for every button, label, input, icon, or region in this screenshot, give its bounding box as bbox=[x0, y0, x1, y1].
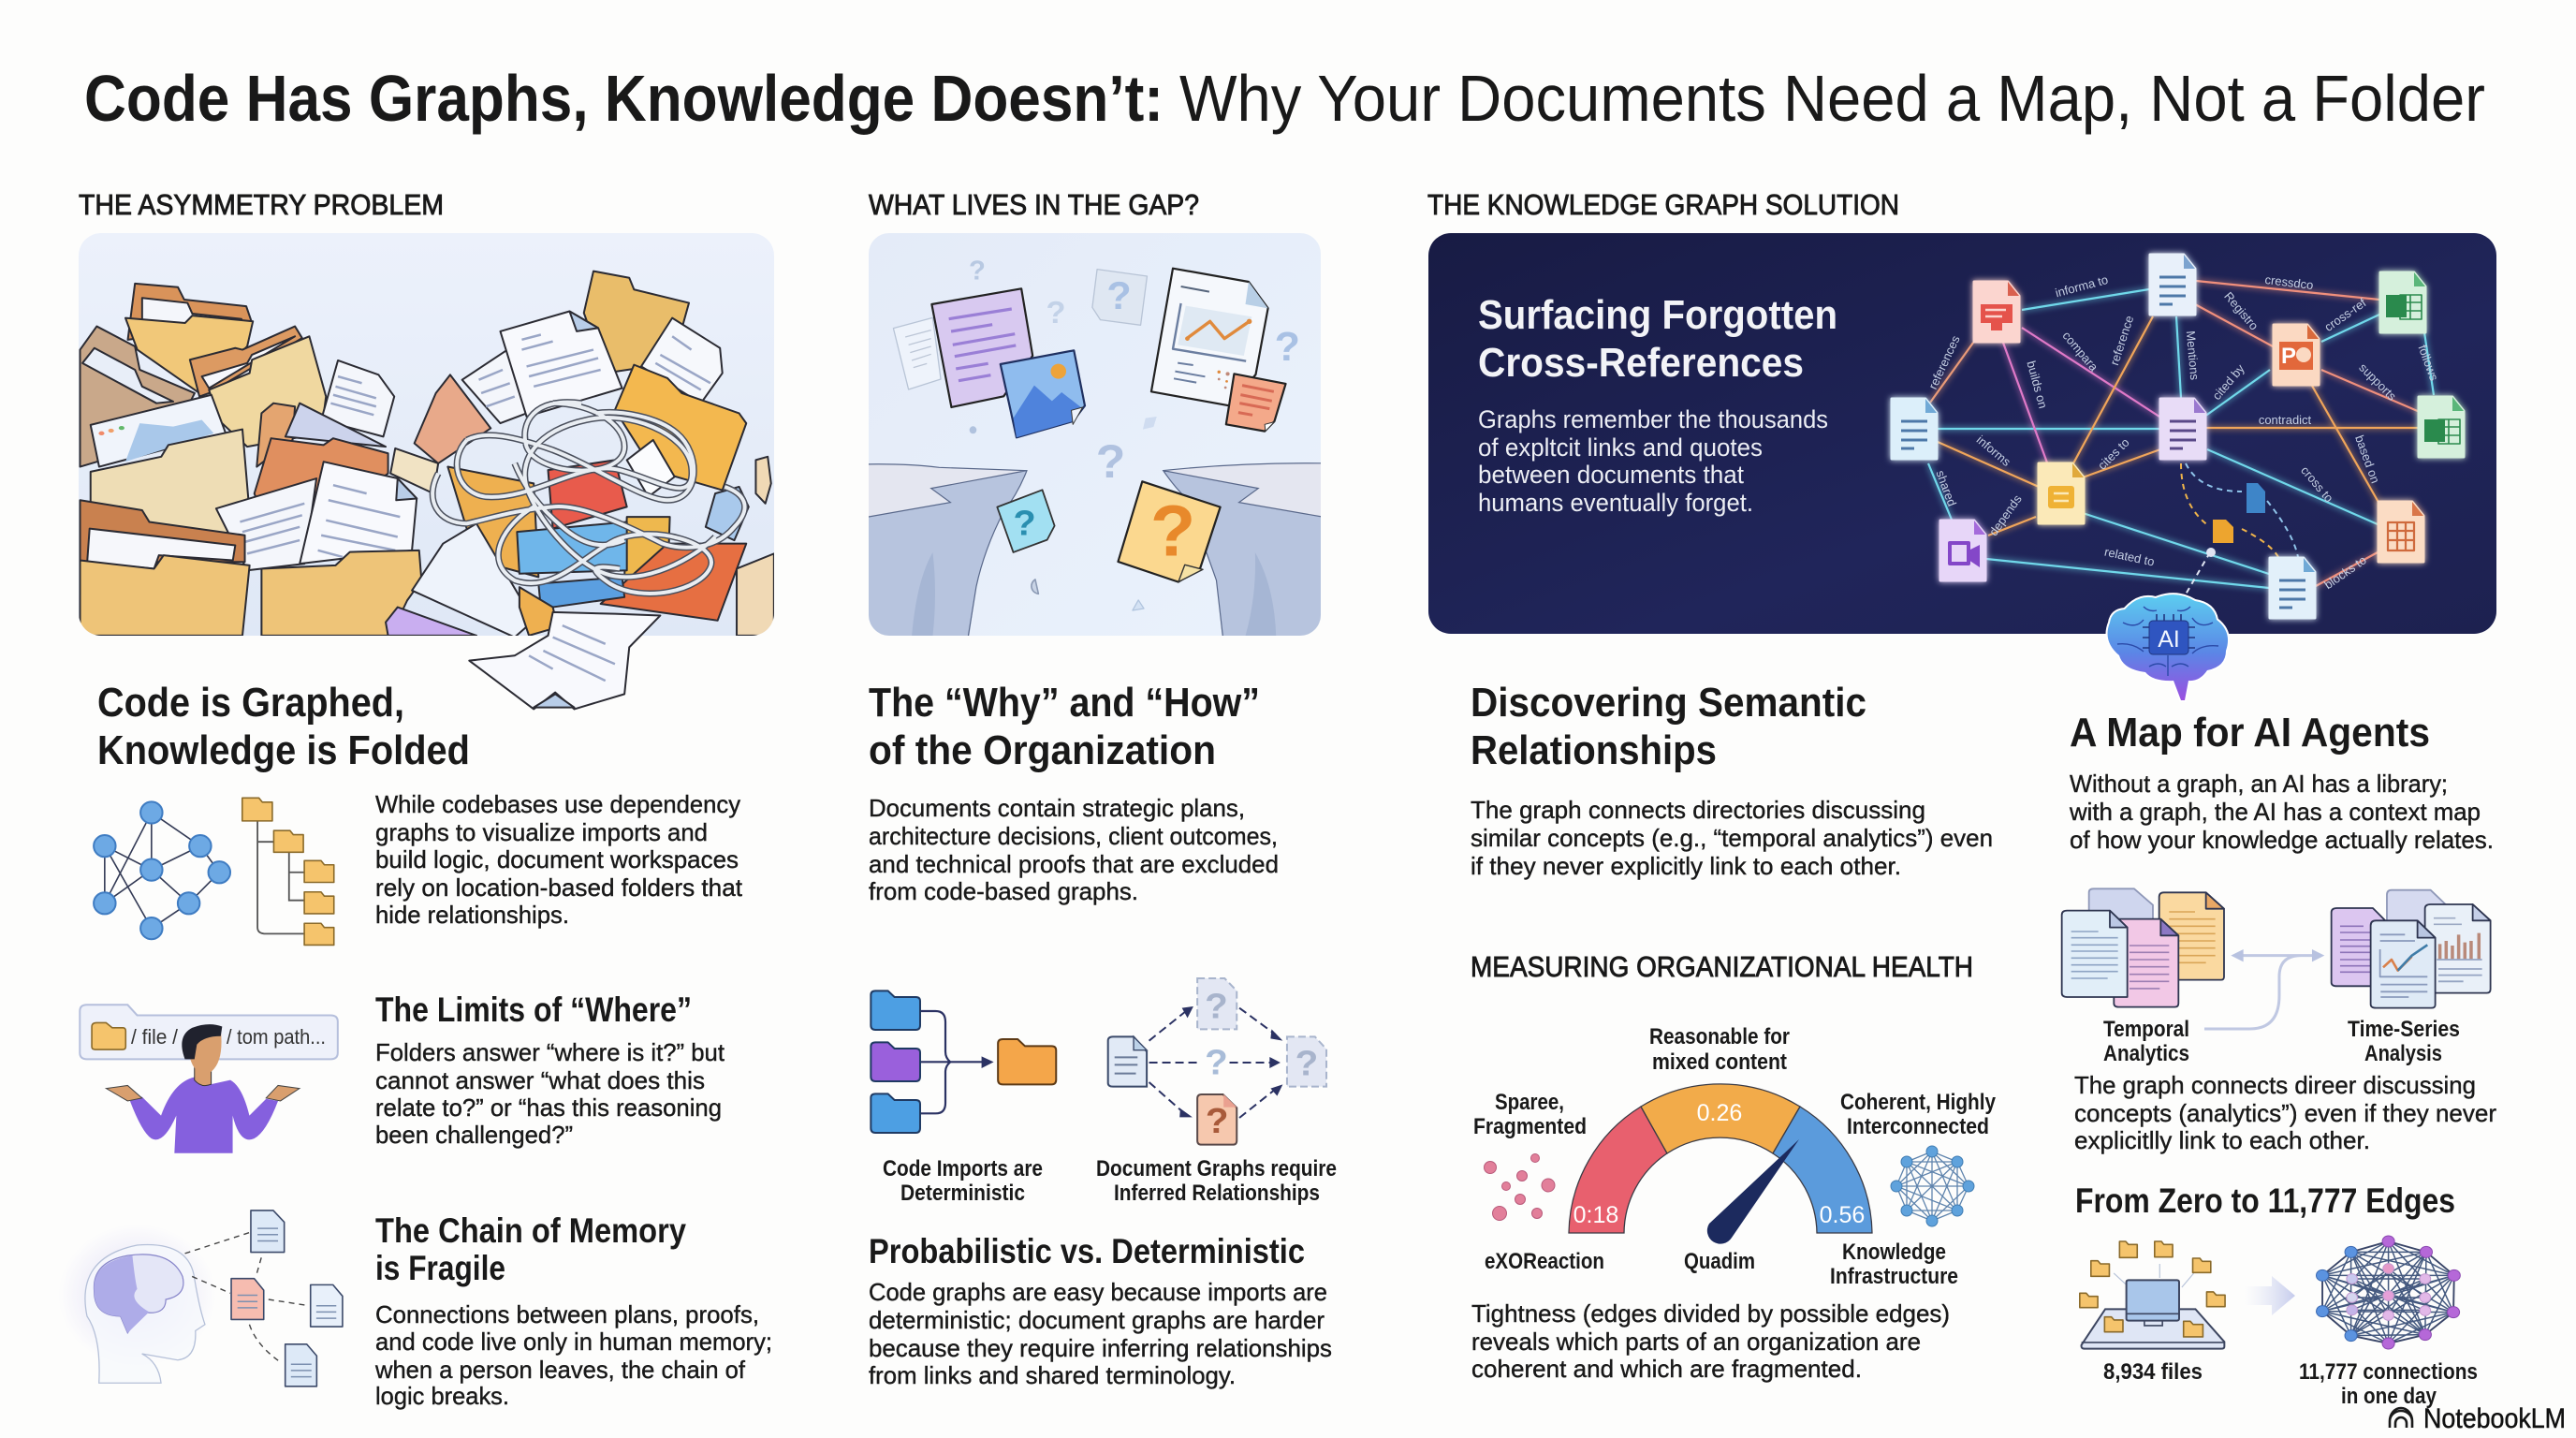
graph document nodes bbox=[1892, 255, 2464, 618]
heading: why and how: of the Organization bbox=[869, 727, 1216, 773]
diagram: files become connections: 11,777 connections bbox=[2299, 1359, 2478, 1385]
edge labels: cites to bbox=[2095, 435, 2132, 473]
heading: code is graphed: Knowledge is Folded bbox=[97, 727, 470, 773]
text: probabilistic vs deterministic: Code graphs are easy because imports are bbox=[869, 1278, 1327, 1306]
panel: tangled folders illustration bbox=[79, 233, 774, 709]
text: probabilistic vs deterministic: Probabilistic vs. Deterministic bbox=[869, 1232, 1305, 1270]
panel: documents floating over a gap: ? bbox=[1046, 295, 1066, 330]
dashed agent paths bbox=[2181, 463, 2298, 599]
text: semantic relationships body: similar concepts (e.g., “temporal analytics”) even bbox=[1471, 824, 1993, 852]
diagram: document stacks linked by concept: Temporal bbox=[2103, 1017, 2189, 1042]
icon: person shrugging at file path: / file / bbox=[131, 1025, 179, 1049]
report document cluster bbox=[1092, 269, 1286, 432]
diagram: code imports converge to a folder: ? bbox=[1295, 1043, 1318, 1083]
text: tightness explanation bbox=[1471, 1299, 1950, 1383]
gauge values: 0.26 bbox=[1697, 1100, 1742, 1126]
gauge labels bbox=[1473, 1024, 1997, 1289]
icon: person shrugging at file path: / tom path... bbox=[227, 1025, 326, 1049]
icon: dense network bbox=[1891, 1146, 1974, 1226]
edge labels: Registro bbox=[2221, 289, 2261, 332]
icon: AI brain bbox=[2108, 594, 2228, 700]
text: why and how body: architecture decisions, client outcomes, bbox=[869, 822, 1278, 850]
text: graph connects body: explicitlly link to each other. bbox=[2074, 1126, 2370, 1154]
text: tightness explanation: coherent and which are fragmented. bbox=[1471, 1355, 1862, 1383]
text: code is graphed body: hide relationships. bbox=[375, 901, 569, 929]
gauge labels: Knowledge bbox=[1842, 1240, 1946, 1265]
title: Code Has Graphs, Knowledge Doesn’t: bbox=[84, 62, 1164, 135]
gauge values: 0:18 bbox=[1573, 1202, 1618, 1228]
text: chain of memory: and code live only in human memory; bbox=[375, 1328, 772, 1356]
chart: tightness gauge bbox=[1473, 1024, 1997, 1289]
text: code is graphed body: While codebases use dependency bbox=[375, 790, 740, 818]
gauge values: 0.56 bbox=[1820, 1202, 1865, 1228]
diagram: document stacks linked by concept: Analysis bbox=[2364, 1041, 2442, 1066]
text: limits of where bbox=[375, 990, 725, 1149]
text: limits of where: cannot answer “what does this bbox=[375, 1066, 705, 1094]
diagram: code imports converge to a folder: Code Imports are bbox=[883, 1156, 1043, 1181]
text: probabilistic vs deterministic bbox=[869, 1232, 1332, 1389]
edge labels: references bbox=[1925, 333, 1963, 391]
edge labels: informa to bbox=[2054, 272, 2110, 300]
edge labels: shared bbox=[1933, 468, 1959, 508]
edge labels: based on bbox=[2352, 433, 2382, 485]
panel: documents floating over a gap: ? bbox=[1096, 435, 1125, 488]
text: map for AI agents: with a graph, the AI has a context map bbox=[2069, 798, 2481, 826]
gauge values bbox=[1573, 1100, 1865, 1228]
text: code is graphed body: build logic, document workspaces bbox=[375, 845, 739, 873]
heading: code is graphed: Code is Graphed, bbox=[97, 680, 404, 726]
card body: humans eventually forget. bbox=[1478, 489, 1753, 517]
text: code is graphed body: graphs to visualize imports and bbox=[375, 818, 708, 846]
text: semantic relationships body bbox=[1471, 796, 1993, 880]
text: map for AI agents bbox=[2069, 710, 2494, 854]
gauge labels: Coherent, Highly bbox=[1840, 1090, 1997, 1115]
edge labels: informs bbox=[1974, 433, 2013, 469]
panel: documents floating over a gap: ? bbox=[1013, 504, 1036, 543]
needle bbox=[1707, 1139, 1799, 1244]
heading: semantic relationships bbox=[1471, 680, 1866, 773]
text: map for AI agents: A Map for AI Agents bbox=[2070, 710, 2430, 756]
gauge labels: Infrastructure bbox=[1830, 1264, 1958, 1289]
card heading bbox=[1478, 292, 1837, 386]
card body: Graphs remember the thousands bbox=[1478, 405, 1828, 433]
icon: head with fragile document chain bbox=[58, 1211, 343, 1387]
card heading: Cross-References bbox=[1478, 340, 1804, 386]
panel: documents floating over a gap: ? bbox=[1275, 325, 1300, 370]
diagram: files become connections: in one day bbox=[2341, 1384, 2437, 1409]
panel: documents floating over a gap: ? bbox=[969, 257, 986, 286]
edge labels: cross to bbox=[2298, 463, 2336, 505]
graph document nodes: P bbox=[2281, 344, 2296, 369]
diagram: code imports converge to a folder: ? bbox=[1205, 986, 1228, 1026]
diagram: code imports converge to a folder: Inferred Relationships bbox=[1114, 1181, 1320, 1206]
text: chain of memory: Connections between plans, proofs, bbox=[375, 1300, 759, 1328]
text: chain of memory: logic breaks. bbox=[375, 1382, 509, 1410]
panel: documents floating over a gap: ? bbox=[1106, 274, 1132, 317]
title bbox=[84, 62, 2485, 135]
panel: knowledge graph dark card bbox=[1428, 233, 2496, 634]
text: limits of where: been challenged?” bbox=[375, 1121, 573, 1149]
section heading: knowledge graph solution: THE KNOWLEDGE GRAPH SOLUTION bbox=[1427, 188, 1899, 221]
title: Why Your Documents Need a Map, Not a Folder bbox=[1179, 62, 2485, 135]
text: semantic relationships body: The graph connects directories discussing bbox=[1471, 796, 1925, 824]
gauge labels: Fragmented bbox=[1473, 1114, 1587, 1139]
cliffs bbox=[862, 463, 1329, 643]
text: why and how body: Documents contain strategic plans, bbox=[869, 794, 1245, 822]
hanging paper sheet bbox=[469, 612, 660, 709]
card heading: Surfacing Forgotten bbox=[1478, 292, 1837, 338]
diagram: document stacks linked by concept bbox=[2062, 888, 2491, 1066]
diagram: code imports converge to a folder: Deterministic bbox=[900, 1181, 1025, 1206]
text: code is graphed body: rely on location-based folders that bbox=[375, 873, 743, 902]
diagram: code imports converge to a folder: Document Graphs require bbox=[1096, 1156, 1337, 1181]
text: map for AI agents: Without a graph, an AI has a library; bbox=[2070, 770, 2448, 798]
text: why and how body: from code-based graphs. bbox=[869, 877, 1138, 905]
text: chain of memory bbox=[374, 1211, 772, 1410]
edge labels: contradict bbox=[2259, 413, 2312, 427]
edge labels bbox=[1925, 272, 2441, 592]
small floating nodes bbox=[2206, 483, 2265, 557]
icon: dense connections graph bbox=[2317, 1236, 2460, 1349]
text: chain of memory: when a person leaves, the chain of bbox=[374, 1356, 746, 1384]
diagram: code imports converge to a folder bbox=[871, 978, 1337, 1206]
edge labels: blocks to bbox=[2321, 552, 2369, 592]
icon: laptop with folders bbox=[2080, 1241, 2225, 1349]
diagram: document stacks linked by concept: Time-Series bbox=[2348, 1017, 2460, 1042]
text: limits of where: The Limits of “Where” bbox=[375, 990, 692, 1029]
text: code is graphed body bbox=[375, 790, 743, 929]
heading: code is graphed bbox=[97, 680, 470, 773]
arrow bbox=[2245, 1276, 2295, 1315]
heading: why and how: The “Why” and “How” bbox=[869, 680, 1260, 726]
section heading: what lives in the gap: WHAT LIVES IN THE GAP? bbox=[869, 188, 1199, 221]
edge labels: follows bbox=[2415, 343, 2441, 383]
text: tightness explanation: Tightness (edges divided by possible edges) bbox=[1471, 1299, 1950, 1328]
diagram: code imports converge to a folder: ? bbox=[1205, 1042, 1228, 1082]
text: map for AI agents: of how your knowledge actually relates. bbox=[2070, 826, 2494, 854]
question notes bbox=[970, 417, 1221, 610]
card body: of expltcit links and quotes bbox=[1478, 433, 1763, 462]
text: why and how body bbox=[869, 794, 1279, 905]
text: why and how body: and technical proofs that are excluded bbox=[869, 850, 1279, 878]
heading: why and how bbox=[869, 680, 1260, 773]
heading: semantic relationships: Discovering Semantic bbox=[1471, 680, 1866, 726]
icon: scattered dots bbox=[1485, 1153, 1555, 1221]
gauge labels: Interconnected bbox=[1847, 1114, 1989, 1139]
purple document cluster bbox=[893, 288, 1085, 437]
section heading: asymmetry problem: THE ASYMMETRY PROBLEM bbox=[79, 188, 444, 221]
gauge labels: Quadim bbox=[1684, 1249, 1755, 1274]
text: probabilistic vs deterministic: deterministic; document graphs are harder bbox=[869, 1306, 1325, 1334]
card body bbox=[1478, 405, 1828, 517]
text: limits of where: relate to?” or “has this reasoning bbox=[375, 1093, 722, 1122]
edge labels: related to bbox=[2103, 545, 2156, 569]
graph edges bbox=[1928, 281, 2434, 588]
heading: organizational health: MEASURING ORGANIZATIONAL HEALTH bbox=[1471, 950, 1973, 983]
heading: semantic relationships: Relationships bbox=[1471, 727, 1717, 773]
diagram: files become connections bbox=[2080, 1236, 2478, 1409]
card body: between documents that bbox=[1478, 461, 1744, 489]
edge labels: depends bbox=[1986, 492, 2025, 538]
edge labels: cited by bbox=[2209, 361, 2247, 403]
gauge labels: eXOReaction bbox=[1485, 1249, 1604, 1274]
diagram: code imports converge to a folder: ? bbox=[1206, 1101, 1229, 1141]
text: limits of where: Folders answer “where is it?” but bbox=[375, 1038, 725, 1066]
text: semantic relationships body: if they never explicitly link to each other. bbox=[1471, 852, 1901, 880]
edge labels: cross-ref bbox=[2321, 295, 2369, 334]
edge labels: Mentions bbox=[2184, 330, 2202, 381]
edge labels: supports bbox=[2356, 360, 2399, 404]
text: graph connects body: concepts (analytics”) even if they never bbox=[2074, 1099, 2496, 1127]
edge labels: cressdco bbox=[2264, 272, 2314, 292]
text: graph connects body bbox=[2074, 1071, 2496, 1154]
text: probabilistic vs deterministic: because they require inferring relationships bbox=[869, 1334, 1332, 1362]
diagram: document stacks linked by concept: Analytics bbox=[2103, 1041, 2189, 1066]
panel: documents floating over a gap bbox=[862, 233, 1329, 643]
gauge labels: Reasonable for bbox=[1649, 1024, 1790, 1049]
gauge labels: mixed content bbox=[1652, 1049, 1787, 1075]
icon: person shrugging at file path bbox=[80, 1005, 338, 1153]
text: chain of memory: The Chain of Memory bbox=[375, 1211, 686, 1250]
gauge labels: Sparee, bbox=[1495, 1090, 1564, 1115]
heading: zero to edges: From Zero to 11,777 Edges bbox=[2075, 1181, 2455, 1220]
text: tightness explanation: reveals which parts of an organization are bbox=[1471, 1328, 1921, 1356]
icon: graph versus folder tree bbox=[94, 798, 334, 945]
icon: AI brain: AI bbox=[2158, 626, 2180, 653]
edge labels: reference bbox=[2107, 314, 2136, 367]
text: chain of memory: is Fragile bbox=[375, 1249, 505, 1287]
panel: documents floating over a gap: ? bbox=[1150, 490, 1195, 571]
edge labels: compara bbox=[2059, 329, 2101, 374]
edge labels: builds on bbox=[2024, 360, 2050, 410]
text: probabilistic vs deterministic: from links and shared terminology. bbox=[869, 1361, 1236, 1389]
diagram: files become connections: 8,934 files bbox=[2103, 1359, 2203, 1385]
text: graph connects body: The graph connects direer discussing bbox=[2074, 1071, 2476, 1099]
